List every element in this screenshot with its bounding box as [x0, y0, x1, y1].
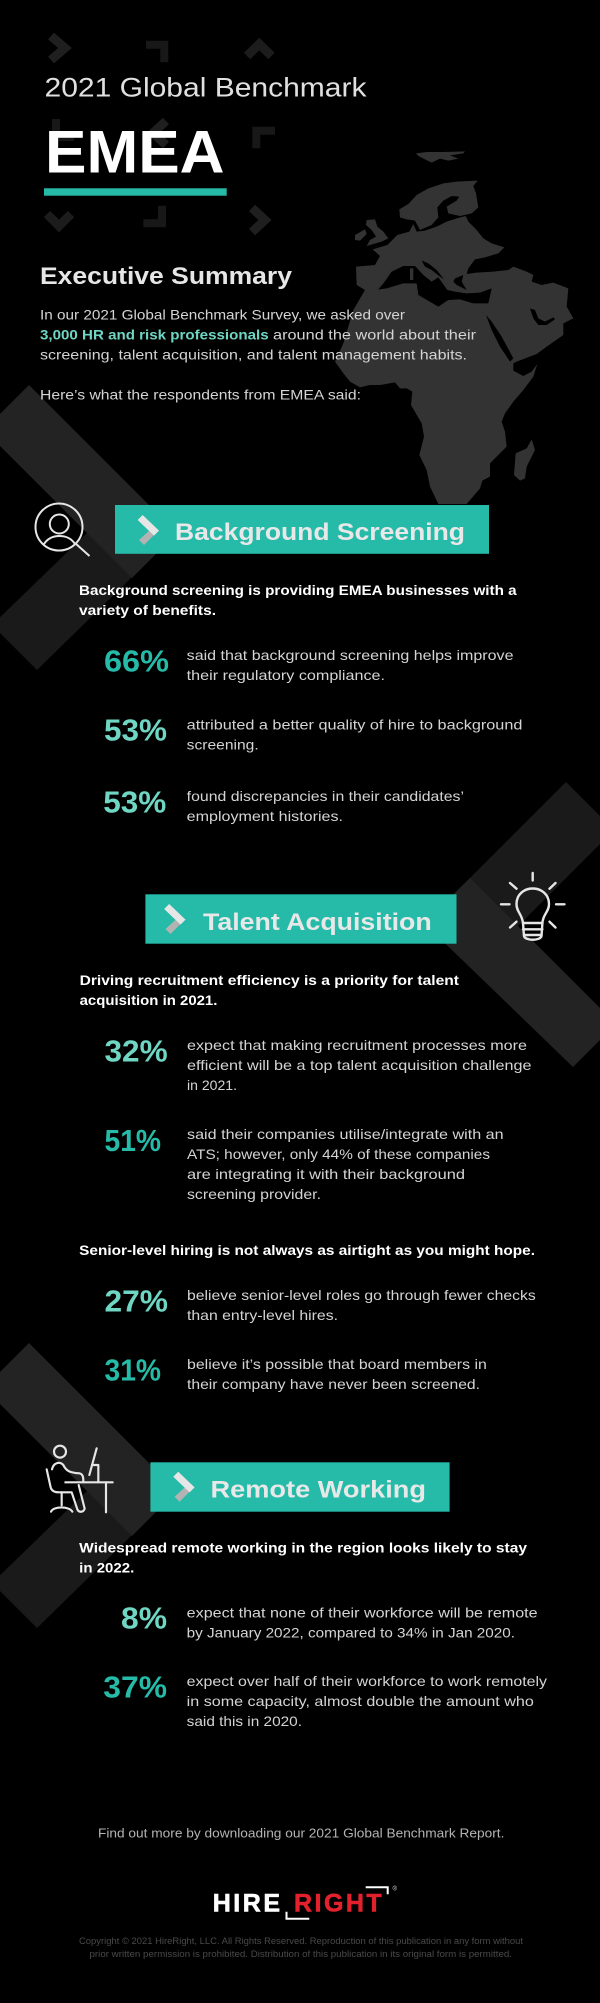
- stat 37%: said this in 2020.: [187, 1713, 302, 1729]
- stat 53% discrepancies: [103, 786, 464, 824]
- lead text: variety of benefits.: [79, 602, 216, 618]
- decorative chevron shape left top: [0, 385, 177, 670]
- title: 2021 Global Benchmark: [44, 73, 367, 103]
- HireRight logo: HIRE: [213, 1890, 280, 1918]
- HireRight logo: RIGHT: [294, 1890, 382, 1918]
- stat 51%: said their companies utilise/integrate with an: [187, 1126, 504, 1142]
- title underline: [44, 188, 227, 196]
- stat 32%: expect that making recruitment processes more: [187, 1037, 527, 1053]
- stat 31%: 31%: [104, 1354, 161, 1388]
- stat 51%: are integrating it with their background: [187, 1166, 465, 1182]
- stat 31%: their company have never been screened.: [187, 1376, 480, 1392]
- executive summary: Executive Summary: [40, 263, 292, 290]
- stat 53% quality: attributed a better quality of hire to background: [187, 716, 522, 732]
- stat 66%: 66%: [104, 645, 169, 679]
- heading: Background Screening: [175, 519, 465, 546]
- stat 27%: [104, 1285, 536, 1323]
- copyright: prior written permission is prohibited. Distribution of this publication in its original form is permitted.: [90, 1949, 512, 1959]
- decorative chevron shape left bottom: [0, 1343, 177, 1628]
- stat 37%: 37%: [103, 1670, 167, 1704]
- lead text: Background screening is providing EMEA businesses with a: [79, 582, 517, 598]
- map of EMEA: [335, 151, 573, 504]
- intro text: 3,000 HR and risk professionals: [40, 326, 269, 342]
- section: background screening: [36, 504, 522, 824]
- stat 66%: their regulatory compliance.: [187, 667, 385, 683]
- copyright: [79, 1936, 524, 1959]
- stat 8%: [121, 1601, 538, 1640]
- stat 27%: believe senior-level roles go through fewer checks: [187, 1287, 536, 1303]
- stat 37%: [103, 1670, 547, 1729]
- stat 32%: efficient will be a top talent acquisition challenge: [187, 1057, 532, 1073]
- stat 8%: by January 2022, compared to 34% in Jan 2020.: [187, 1624, 515, 1640]
- stat 51%: [104, 1124, 504, 1202]
- HireRight logo: [213, 1886, 398, 1919]
- decorative chevron shape right: [424, 782, 600, 1067]
- icon: person at desk: [47, 1446, 113, 1512]
- stat 32%: in 2021.: [187, 1077, 237, 1093]
- intro text: In our 2021 Global Benchmark Survey, we asked over: [40, 306, 405, 322]
- stat 53% discrepancies: employment histories.: [187, 808, 343, 824]
- call to action: Find out more by downloading our 2021 Global Benchmark Report.: [98, 1825, 504, 1840]
- stat 37%: in some capacity, almost double the amount who: [187, 1693, 534, 1709]
- stat 51%: screening provider.: [187, 1186, 321, 1202]
- lead text: acquisition in 2021.: [80, 992, 217, 1008]
- heading: Talent Acquisition: [203, 909, 432, 936]
- seas: [370, 261, 555, 362]
- icon: person search: [36, 504, 90, 556]
- stat 53% quality: 53%: [104, 714, 167, 748]
- HireRight logo: ®: [392, 1886, 398, 1892]
- section: talent acquisition: [79, 873, 564, 1392]
- icon: chevron: [138, 515, 159, 545]
- section: remote working: [47, 1446, 547, 1729]
- stat 66%: [104, 645, 514, 683]
- stat 51%: ATS; however, only 44% of these companies: [187, 1146, 490, 1162]
- icon: light bulb: [501, 873, 564, 940]
- intro text: [40, 306, 476, 402]
- stat 8%: expect that none of their workforce will be remote: [187, 1604, 538, 1620]
- stat 27%: than entry-level hires.: [187, 1307, 338, 1323]
- stat 53% quality: [104, 714, 522, 752]
- stat 32%: [104, 1035, 532, 1093]
- stat 66%: said that background screening helps improve: [187, 647, 514, 663]
- lead text: [79, 1539, 527, 1575]
- intro text: Here’s what the respondents from EMEA said:: [40, 386, 361, 402]
- EMEA heading: EMEA: [45, 118, 224, 186]
- stat 31%: believe it’s possible that board members in: [187, 1356, 487, 1372]
- stat 32%: 32%: [104, 1035, 168, 1069]
- stat 53% discrepancies: found discrepancies in their candidates’: [187, 788, 464, 804]
- stat 51%: 51%: [104, 1124, 161, 1158]
- lead text: in 2022.: [79, 1559, 134, 1575]
- intro text: around the world about their: [273, 326, 476, 342]
- stat 31%: [104, 1354, 487, 1392]
- stat 8%: 8%: [121, 1601, 167, 1635]
- intro text: screening, talent acquisition, and talent management habits.: [40, 346, 467, 362]
- heading bar: [150, 1462, 450, 1512]
- lead text senior-level: Senior-level hiring is not always as airtight as you might hope.: [79, 1242, 535, 1258]
- lead text: [80, 972, 459, 1008]
- stat 53% discrepancies: 53%: [103, 786, 166, 820]
- icon: chevron: [173, 1472, 195, 1502]
- header bracket pattern: [47, 36, 275, 232]
- stat 53% quality: screening.: [187, 736, 259, 752]
- copyright: Copyright © 2021 HireRight, LLC. All Rights Reserved. Reproduction of this publication in any form without: [79, 1936, 524, 1946]
- title: [44, 73, 367, 186]
- stat 37%: expect over half of their workforce to work remotely: [187, 1673, 547, 1689]
- icon: chevron: [164, 904, 185, 934]
- lead text: [79, 582, 517, 618]
- heading bar: [115, 505, 489, 554]
- heading bar: [145, 894, 456, 944]
- lead text: Widespread remote working in the region looks likely to stay: [79, 1539, 527, 1555]
- executive summary: [40, 263, 476, 402]
- heading: Remote Working: [210, 1476, 426, 1503]
- lead text: Driving recruitment efficiency is a priority for talent: [80, 972, 459, 988]
- stat 27%: 27%: [104, 1285, 168, 1319]
